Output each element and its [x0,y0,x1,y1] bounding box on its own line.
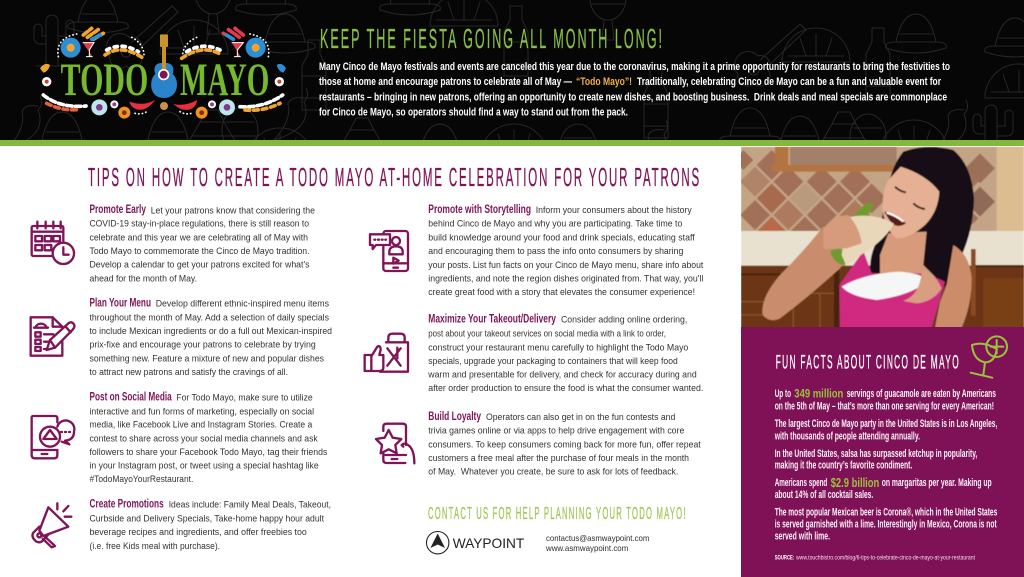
tip: Promote Early: COVID-19 stay-in-place regulations, there is still reason to [90,219,309,229]
tip: Promote with Storytelling: Promote with Storytelling [428,202,531,216]
tip: Post on Social Media: media, like Facebook Live and Instagram Stories. Create a [90,420,312,430]
fact: margaritas: about 14% of all cocktail sales. [775,489,873,501]
tip: Post on Social Media: #TodoMayoYourRestaurant. [90,474,193,484]
tip: Maximize Your Takeout/Delivery: specials, upgrade your packaging to containers that will keep food [428,356,678,366]
tip: Build Loyalty: trivia games online or via apps to help drive engagement with core [428,425,684,435]
tip: Create Promotions: Ideas include: Family Meal Deals, Takeout, [169,500,331,510]
wall tiles [741,150,995,232]
contact details: www.asmwaypoint.com [545,544,628,553]
fact: corona [775,507,997,543]
tip: Promote Early: Todo Mayo to commemorate the Cinco de Mayo tradition. [90,246,310,256]
tip: Build Loyalty [428,409,701,476]
fact: margaritas: Americans spend [775,477,827,489]
tip: Promote Early: Promote Early [90,202,146,216]
fact: largest party: with thousands of people attending annually. [774,430,920,442]
icon: calendar with clock [32,222,74,264]
source line: SOURCE: [775,556,794,562]
header intro paragraph: Traditionally, celebrating Cinco de Mayo can be a fun and valuable event for [637,76,942,88]
tip: Plan Your Menu: something new. Feature a mixture of new and popular dishes [90,353,325,363]
logo wordmark [61,54,269,106]
icon: margarita [971,336,1007,378]
tip: Promote Early [90,202,315,283]
icon: phone with star [376,424,414,463]
header intro paragraph: those at home and encourage patrons to celebrate all of May — [319,76,572,88]
tip: Maximize Your Takeout/Delivery: Maximize Your Takeout/Delivery [428,312,556,326]
tip: Plan Your Menu: prix-fixe and encourage your patrons to celebrate by trying [90,340,316,350]
green rule [0,140,1024,146]
tip: Create Promotions [90,496,331,551]
tip: Plan Your Menu [90,296,332,377]
header intro paragraph [319,61,950,118]
tip: Maximize Your Takeout/Delivery [427,312,703,393]
tip: Plan Your Menu: to attract new patrons and satisfy the cravings of all. [90,367,288,377]
tip: Maximize Your Takeout/Delivery: post about your takeout services on social media with a link to order, [428,328,666,338]
tip: Create Promotions: beverage recipes and ingredients, and offer freebies too [90,527,307,537]
tip: Promote with Storytelling: Inform your consumers about the history [536,205,692,215]
tip: Create Promotions: Curbside and Delivery Specials, Take-home happy hour adult [90,514,325,524]
tip: Plan Your Menu: Plan Your Menu [90,296,151,310]
icon: guitar [151,34,177,98]
logo wordmark: MAYO [180,54,269,106]
tip: Post on Social Media [90,389,328,484]
tip: Build Loyalty: Operators can also get in on the fun contests and [486,412,675,422]
tip: Promote Early: celebrate and this year we are celebrating all of May with [90,232,308,242]
tip: Build Loyalty: consumers. To keep consumers coming back for more fun, offer repeat [428,439,701,449]
fact: margaritas [775,475,992,501]
tip: Build Loyalty: Build Loyalty [428,409,481,423]
photo: woman eating a taco [733,147,1024,329]
fact: salsa: making it the country’s favorite condiment. [775,460,912,472]
logo wordmark: TODO [61,54,148,106]
tip: Plan Your Menu: throughout the month of May. Add a selection of daily specials [90,312,330,322]
tip: Promote with Storytelling: and encouraging them to pass the info onto consumers by sharing [428,246,683,256]
panel: fun facts [741,327,1024,577]
fact: largest party [774,418,997,442]
fact: guacamole: Up to [775,388,791,400]
icon: megaphone [32,503,71,547]
icon: phone with video and chat [370,231,408,271]
contact details [545,534,649,553]
waypoint logo: WAYPOINT [453,535,525,551]
tip: Build Loyalty: customers a free meal after the purchase of four meals in the month [428,453,689,463]
tip: Plan Your Menu: Develop different ethnic-inspired menu items [156,299,330,309]
tip: Create Promotions: Create Promotions [90,496,164,510]
tip: Promote with Storytelling: build knowledge around your food and drink specials, educating staff [428,233,695,243]
tip: Promote Early: ahead for the month of May. [90,273,197,283]
tip: Promote Early: Develop a calendar to get your patrons excited for what's [90,260,310,270]
icon: menu and pencil [31,317,74,356]
tip: Plan Your Menu: to include Mexican ingredients or do a full out Mexican-inspired [90,326,332,336]
header intro paragraph: for Cinco de Mayo, so operators should find a way to stand out from the pack. [319,106,628,118]
tip: Post on Social Media: contest to share across your social media channels and ask [90,433,318,443]
background doodle pattern [14,0,1024,140]
header intro paragraph: “Todo Mayo”! [576,76,632,88]
tip: Post on Social Media: interactive and fun forms of marketing, especially on social [90,406,314,416]
logo florals [40,28,286,119]
fact: guacamole [775,388,996,412]
fact: corona: served with lime. [775,531,830,543]
source line: www.touchbistro.com/blog/6-tips-to-celebrate-cinco-de-mayo-at-your-restaurant [795,556,975,562]
tip: Maximize Your Takeout/Delivery: after order production to ensure the food is what the consumer wanted. [428,383,703,393]
header band [0,0,1024,140]
fact: guacamole: 349 million [794,388,843,400]
tip: Maximize Your Takeout/Delivery: Consider adding online ordering, [561,315,687,325]
tip: Post on Social Media: Post on Social Media [90,389,172,403]
tip: Post on Social Media: For Todo Mayo, make sure to utilize [176,392,313,402]
tip: Create Promotions: (i.e. free Kids meal with purchase). [90,541,220,551]
tip: Promote with Storytelling: behind Cinco de Mayo and why you are participating. Take time to [428,219,682,229]
contact details: contactus@asmwaypoint.com [546,534,649,543]
tip: Post on Social Media: followers to share your Facebook Todo Mayo, tag their friends [90,447,328,457]
tip: Promote with Storytelling [428,202,704,297]
tip: Post on Social Media: in your Instagram post, or tweet using a special hashtag like [90,461,319,471]
tip: Promote with Storytelling: your posts. List fun facts on your Cinco de Mayo menu, share info about [428,260,704,270]
tip: Build Loyalty: of May. Whatever you create, be sure to ask for lots of feedback. [428,466,678,476]
tip: Maximize Your Takeout/Delivery: warm and presentable for delivery, and check for accuracy during and [427,370,697,380]
icon: takeout bag and thumbs up [365,334,408,372]
waypoint logo [426,532,525,554]
tip: Promote with Storytelling: ingredients, and note the region dishes originated from. That way, you'll [428,273,703,283]
text: CONTACT US FOR HELP PLANNING YOUR TODO MAYO! [428,503,687,523]
fact: margaritas: $2.9 billion [831,475,879,490]
tip: Promote Early: Let your patrons know that considering the [151,205,315,215]
tip: Maximize Your Takeout/Delivery: construct your restaurant menu carefully to highlight the Todo Mayo [428,342,688,352]
logo: Todo Mayo [40,28,286,119]
fact: salsa [775,448,977,472]
icon: phone with social bubbles [32,416,74,458]
tip: Promote with Storytelling: create great food with a story that elevates the consumer experience! [428,287,695,297]
